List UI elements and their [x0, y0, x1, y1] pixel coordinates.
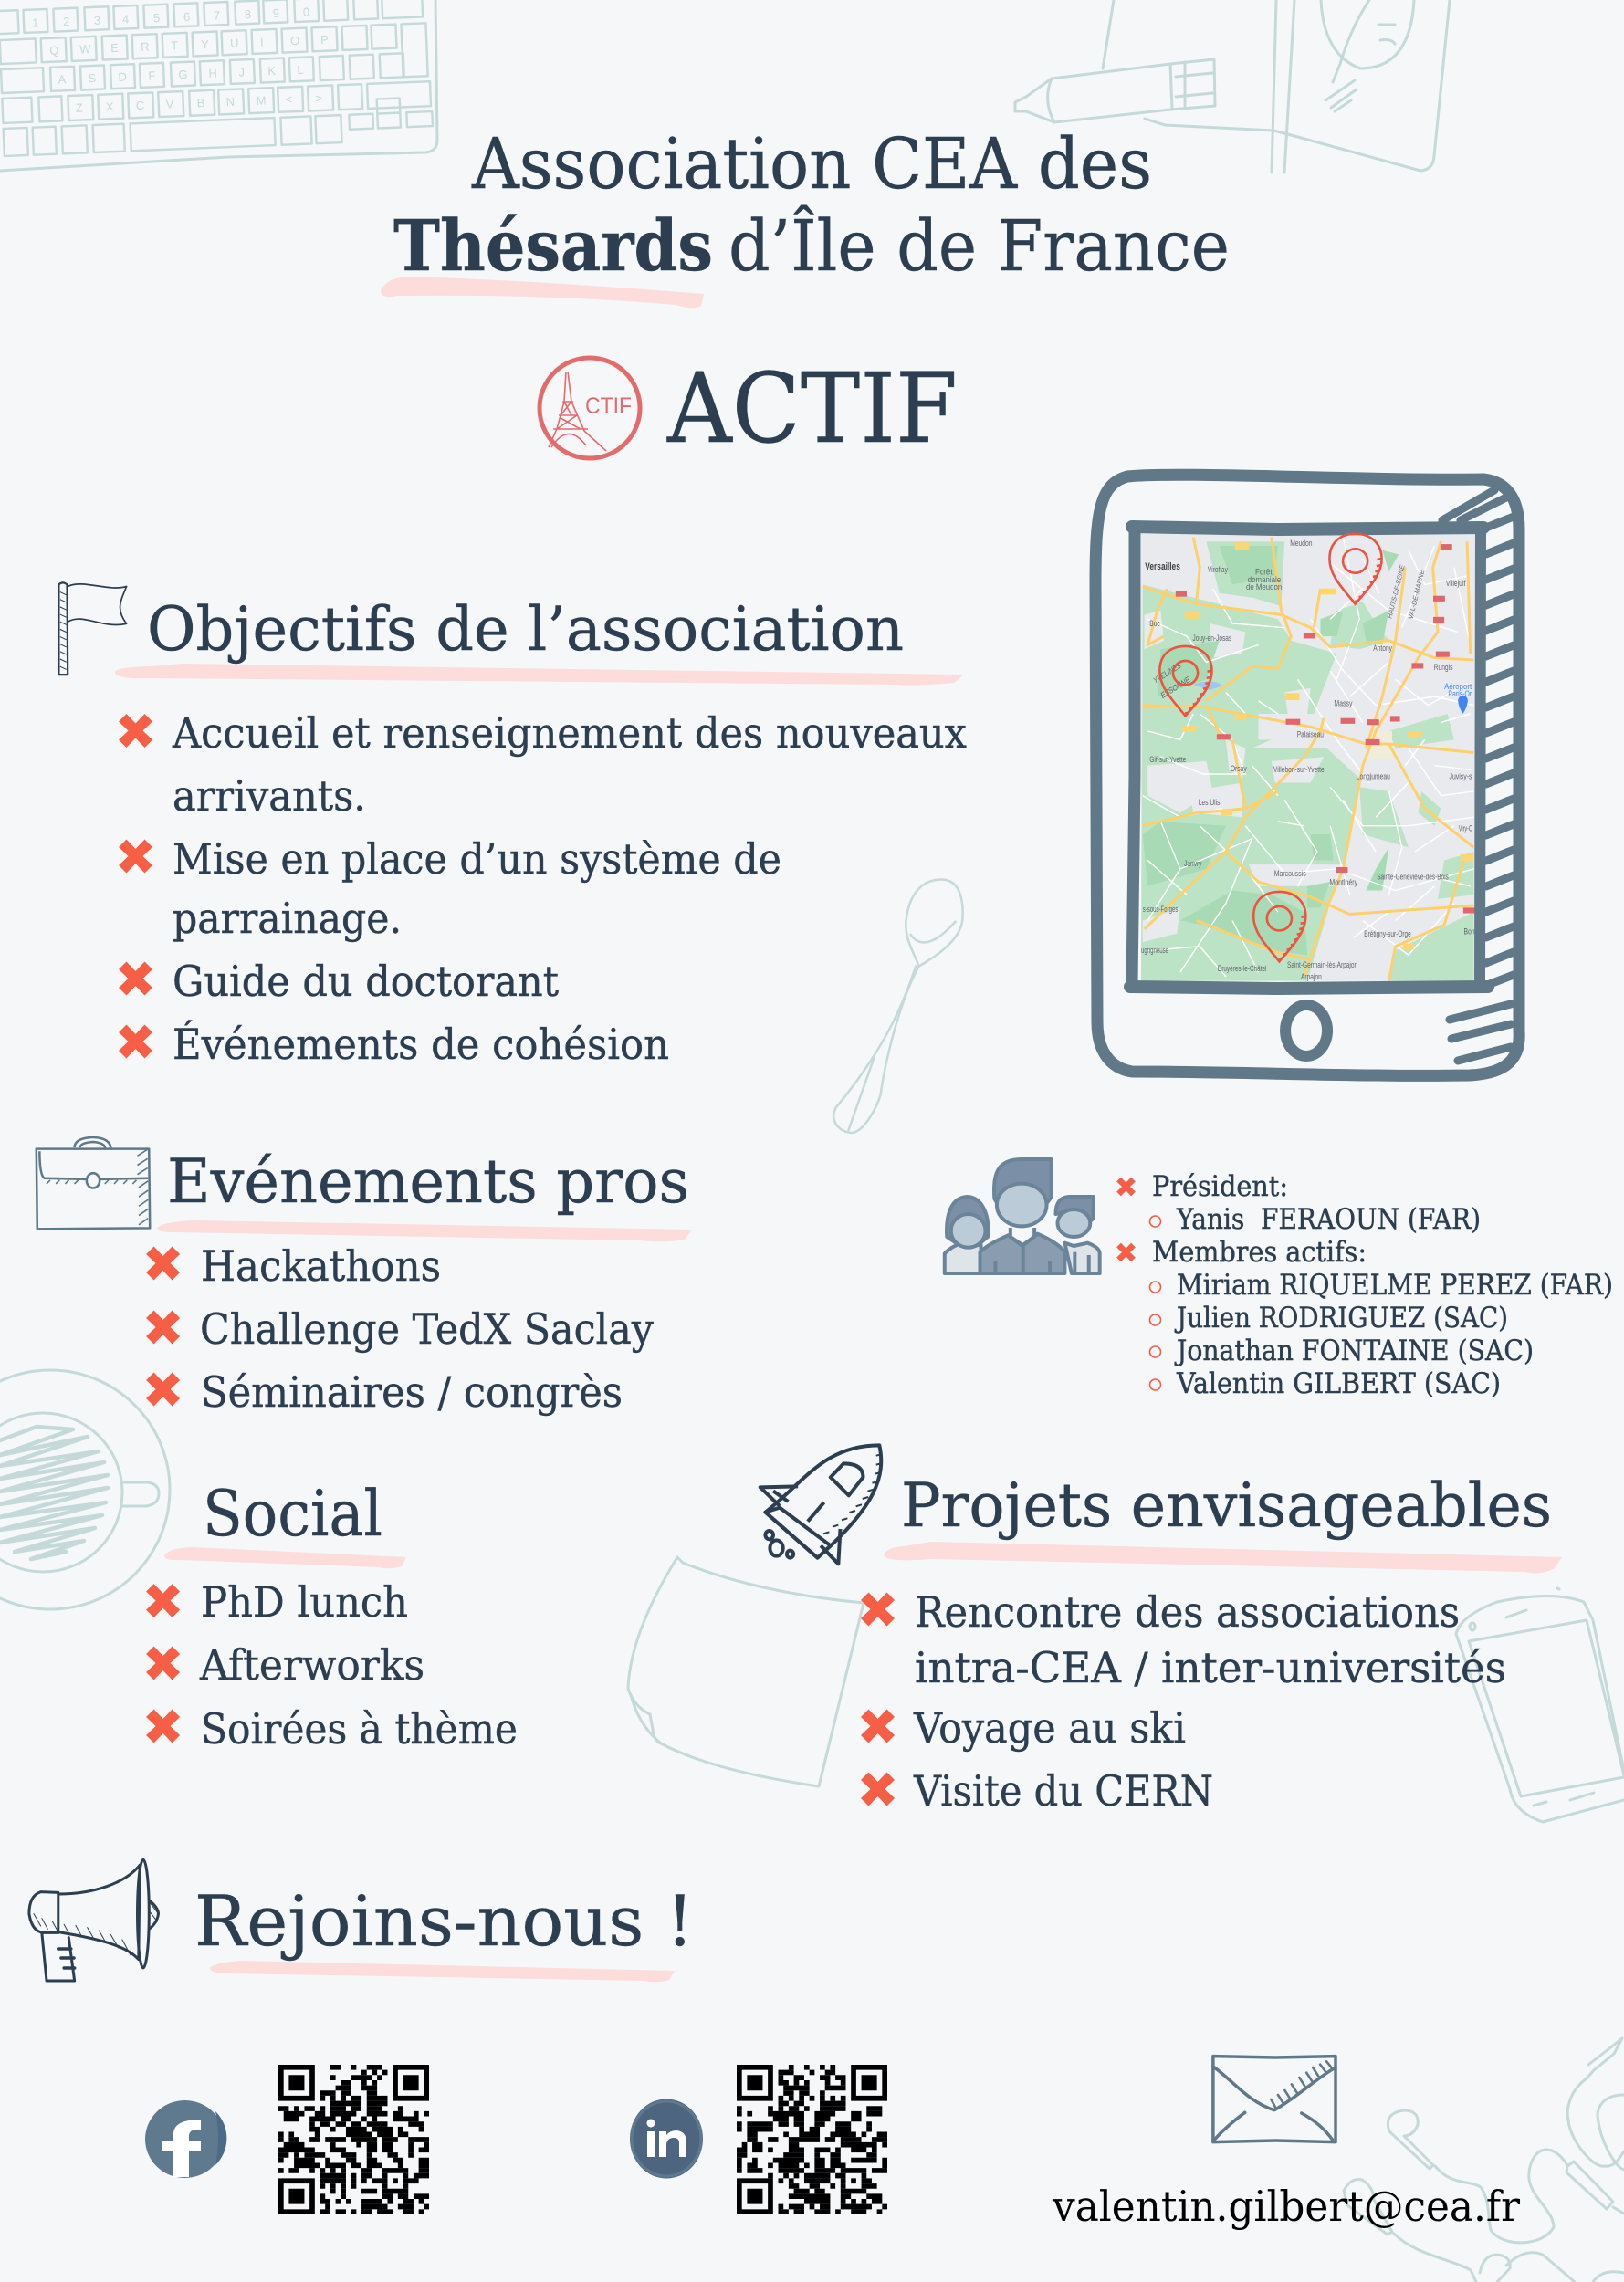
bullet list: Guide du doctorant — [173, 957, 559, 1006]
map: Bruyères-le-Châtel — [1218, 963, 1267, 973]
bullet list: Accueil et renseignement des nouveaux — [172, 708, 967, 758]
title: Thésards — [393, 205, 713, 288]
title: Association CEA des — [471, 124, 1152, 205]
panel: evenements pros — [37, 1137, 692, 1417]
member list: Jonathan FONTAINE (SAC) — [1174, 1335, 1534, 1367]
bullet list: arrivants. — [173, 771, 366, 821]
bullet list: Visite du CERN — [913, 1766, 1213, 1816]
heading: Objectifs de l’association — [147, 594, 904, 665]
map: Gif-sur-Yvette — [1149, 754, 1187, 764]
map: Palaiseau — [1297, 728, 1324, 739]
panel: team — [945, 1159, 1613, 1400]
icon: team — [945, 1159, 1100, 1273]
background sketch: pen and notebook — [1015, 0, 1450, 173]
map: VAL-DE-MARNE — [1407, 568, 1426, 621]
map: Forêt — [1255, 567, 1273, 577]
panel: social — [146, 1478, 518, 1753]
tablet frame — [1095, 475, 1519, 1075]
map: de Meudon — [1246, 581, 1283, 591]
heading: Rejoins-nous ! — [194, 1880, 694, 1962]
member list: Président: — [1152, 1170, 1288, 1203]
bullet list — [146, 1241, 654, 1417]
icon: rocket — [760, 1445, 881, 1564]
member list: Yanis FERAOUN (FAR) — [1176, 1203, 1481, 1236]
map: Juvisy-s — [1449, 771, 1472, 781]
map: Arpajon — [1301, 971, 1322, 981]
icon: flag — [58, 582, 127, 675]
background sketch: keyboard: ASDFGHJKL — [58, 63, 304, 87]
map: Montlhéry — [1329, 876, 1358, 887]
icon: briefcase — [37, 1137, 150, 1229]
title underline — [381, 277, 704, 308]
member list: Membres actifs: — [1152, 1236, 1367, 1269]
bullet list: Soirées à thème — [201, 1704, 518, 1753]
bullet list: Séminaires / congrès — [201, 1367, 623, 1417]
map: s-sous-Forges — [1143, 904, 1178, 914]
heading: Projets envisageables — [901, 1471, 1552, 1541]
map: Rungis — [1434, 662, 1452, 672]
heading: Evénements pros — [167, 1146, 689, 1217]
map: ESSONNE — [1159, 674, 1191, 701]
title — [393, 124, 1230, 288]
map pins — [1159, 534, 1382, 961]
map: domaniale — [1248, 574, 1282, 584]
bullet list: intra-CEA / inter-universités — [915, 1643, 1506, 1692]
map: Massy — [1334, 698, 1353, 708]
bullet list: parrainage. — [173, 894, 402, 943]
map: Viroflay — [1208, 564, 1229, 574]
bullet list: Voyage au ski — [913, 1703, 1186, 1753]
map: Longjumeau — [1357, 770, 1390, 781]
panel: rejoins-nous — [29, 1859, 694, 1982]
map: Villejuif — [1446, 578, 1466, 588]
bullet list: Hackathons — [201, 1241, 441, 1291]
title: d’Île de France — [728, 204, 1230, 288]
map: Sainte-Geneviève-des-Bois — [1377, 872, 1449, 882]
member list — [1116, 1170, 1613, 1400]
bullet list: Challenge TedX Saclay — [200, 1304, 654, 1354]
map: Versailles — [1145, 561, 1180, 572]
map: HAUTS-DE-SEINE — [1386, 563, 1406, 620]
icon: megaphone — [29, 1859, 158, 1981]
underline — [157, 1220, 692, 1241]
map: Jouy-en-Josas — [1192, 633, 1231, 643]
logo: ACTIF Eiffel tower circle: CTIF — [585, 393, 632, 419]
underline — [884, 1542, 1562, 1573]
icon: facebook — [145, 2100, 226, 2178]
map: Aéroport — [1444, 681, 1472, 691]
map: Meudon — [1290, 538, 1313, 548]
background sketch: keyboard: 1234567890 — [32, 5, 309, 30]
underline — [164, 1547, 406, 1568]
background sketch: spoon — [833, 880, 963, 1133]
map: Saint-Germain-lès-Arpajon — [1287, 959, 1357, 969]
map: Villebon-sur-Yvette — [1273, 764, 1325, 774]
QR code: facebook — [278, 2067, 429, 2212]
map: ugrigneuse — [1141, 945, 1168, 955]
map: Viry-C — [1459, 822, 1472, 833]
bullet list: Mise en place d’un système de — [173, 834, 781, 884]
background sketch: smartphone — [1456, 1588, 1624, 1822]
map: Les Ulis — [1199, 797, 1220, 807]
heading: ACTIF: ACTIF — [666, 352, 958, 465]
icon: linkedin — [630, 2099, 703, 2178]
heading: Social — [203, 1478, 382, 1551]
panel: objectifs de l'association — [58, 582, 967, 1069]
background sketch: coffee cup — [0, 1370, 170, 1609]
background sketch: earphones — [1344, 2038, 1624, 2282]
map: Janvry — [1184, 858, 1202, 868]
map: Antony — [1373, 643, 1393, 653]
bullet list — [119, 708, 967, 1069]
bullet list — [861, 1587, 1506, 1816]
bullet list — [146, 1577, 518, 1753]
map: Orsay — [1231, 763, 1247, 773]
bullet list: Événements de cohésion — [173, 1019, 669, 1069]
map: Bon — [1464, 926, 1475, 937]
member list: Valentin GILBERT (SAC) — [1176, 1367, 1501, 1400]
map: YVELINES — [1152, 660, 1182, 686]
map — [1141, 534, 1476, 981]
underline — [210, 1961, 675, 1982]
background sketch: keyboard: QWERTYUIOP — [49, 33, 329, 58]
panel: projets envisageables — [760, 1445, 1562, 1816]
bullet list: Afterworks — [199, 1640, 424, 1690]
background sketch: keyboard: ZXCVBNM<> — [76, 91, 322, 115]
map: Marcoussis — [1274, 868, 1306, 878]
underline — [115, 664, 964, 686]
bullet list: Rencontre des associations — [915, 1587, 1460, 1637]
tablet with map — [1095, 475, 1519, 1075]
email address: valentin.gilbert@cea.fr — [1052, 2182, 1520, 2231]
logo: ACTIF Eiffel tower circle — [540, 358, 640, 458]
icon: envelope — [1213, 2057, 1336, 2142]
background sketch: blank sheet — [628, 1557, 864, 1786]
background sketch: keyboard — [0, 0, 437, 171]
member list: Julien RODRIGUEZ (SAC) — [1174, 1302, 1508, 1335]
map: Brétigny-sur-Orge — [1364, 928, 1411, 938]
QR code: linkedin — [737, 2067, 887, 2212]
map: Buc — [1149, 618, 1160, 628]
bullet list: PhD lunch — [201, 1577, 408, 1627]
map: Paris-Or — [1448, 688, 1472, 698]
